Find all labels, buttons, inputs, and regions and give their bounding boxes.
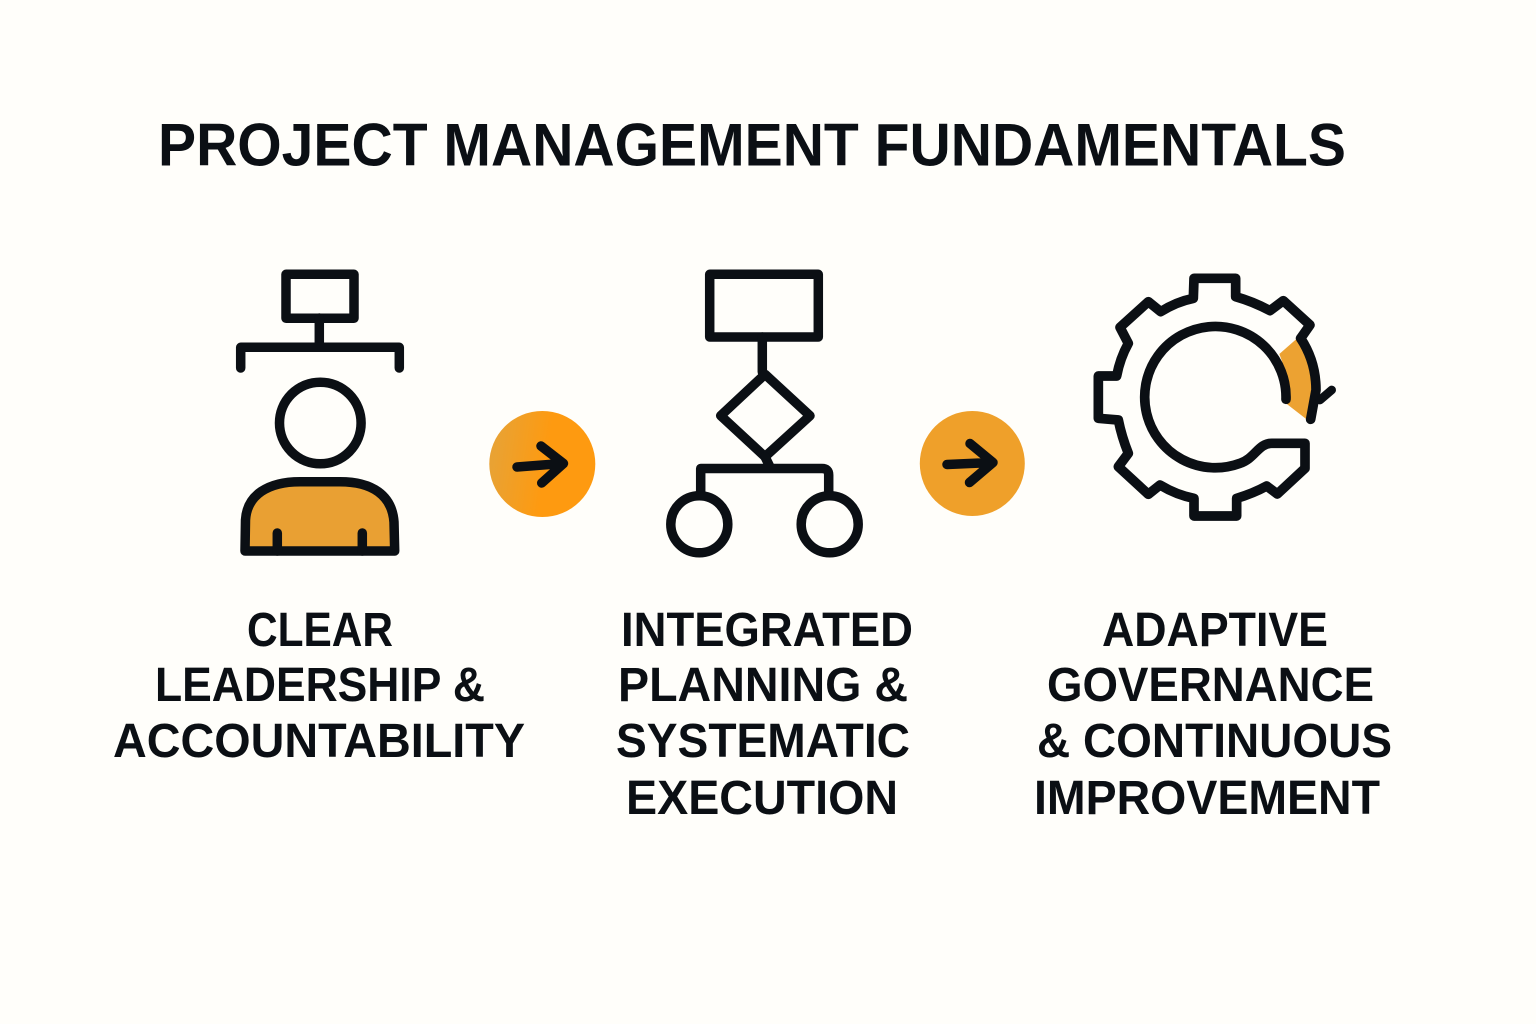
title: PROJECT MANAGEMENT FUNDAMENTALS — [158, 112, 1346, 178]
arrow: first step — [489, 411, 595, 517]
arrow: second step — [920, 411, 1025, 516]
label: integrated planning and systematic execution: EXECUTION — [626, 772, 898, 825]
label: integrated planning and systematic execution: SYSTEMATIC — [616, 715, 910, 768]
label: clear leadership and accountability — [113, 604, 525, 768]
decision diamond — [721, 374, 810, 457]
icon: leader with org chart — [241, 274, 399, 551]
left node — [671, 496, 728, 553]
label: clear leadership and accountability: LEADERSHIP & — [155, 659, 485, 712]
label: integrated planning and systematic execution: PLANNING & — [618, 659, 908, 712]
label: adaptive governance and continuous improvement: ADAPTIVE — [1102, 604, 1328, 657]
label: adaptive governance and continuous improvement: & CONTINUOUS — [1037, 715, 1392, 768]
label: adaptive governance and continuous improvement — [1034, 604, 1392, 825]
gear outer arc — [1301, 338, 1316, 419]
gear outline — [1098, 278, 1310, 516]
person head — [280, 382, 361, 464]
label: clear leadership and accountability: CLEAR — [247, 604, 393, 657]
org chart connector — [241, 318, 399, 368]
right node — [801, 496, 858, 553]
flowchart stem — [758, 337, 767, 372]
orange highlight segment — [1279, 339, 1312, 419]
flowchart box — [710, 274, 818, 337]
label: integrated planning and systematic execution — [616, 604, 913, 825]
label: clear leadership and accountability: ACCOUNTABILITY — [113, 715, 525, 768]
branching connector — [701, 457, 829, 492]
icon: process flowchart — [671, 274, 858, 553]
tick mark — [1320, 390, 1332, 400]
label: integrated planning and systematic execution: INTEGRATED — [621, 604, 913, 657]
label: adaptive governance and continuous improvement: GOVERNANCE — [1047, 659, 1374, 712]
org chart box — [286, 274, 354, 318]
person arms — [277, 533, 362, 551]
label: adaptive governance and continuous improvement: IMPROVEMENT — [1034, 772, 1380, 825]
icon: gear with improvement loop — [1098, 278, 1332, 516]
person body — [245, 482, 395, 551]
